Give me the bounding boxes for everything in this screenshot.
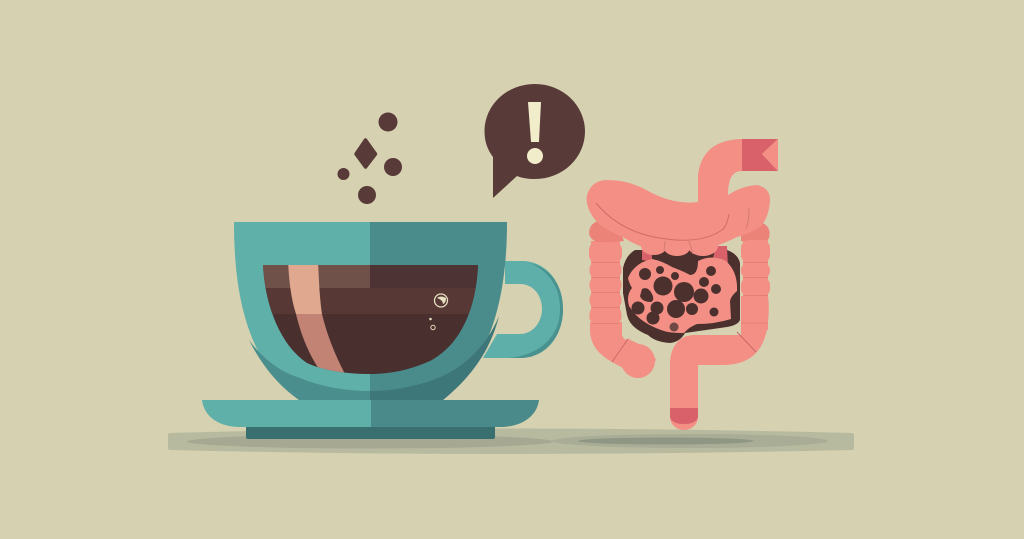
coffee cup: [234, 222, 563, 400]
cup handle: [483, 261, 563, 358]
cream stripe: [288, 260, 322, 314]
upper tube and transverse colon: [587, 139, 778, 256]
ground shadow: [168, 428, 854, 454]
intestine cavities: [632, 266, 721, 324]
right colon and rectum: [670, 222, 770, 430]
steam particles: [338, 112, 402, 204]
saucer: [202, 400, 539, 439]
intestines: [587, 139, 778, 430]
cup body: [234, 222, 370, 400]
cup lower shading: [249, 340, 370, 400]
small red connectors: [642, 250, 652, 262]
small intestine pink mass: [628, 258, 737, 333]
coffee: [263, 265, 478, 374]
red tube end: [742, 139, 778, 171]
lobes under the stomach: [641, 236, 718, 256]
left ascending colon: [589, 220, 656, 378]
central dark mass: [623, 250, 740, 343]
bubbles: [429, 294, 448, 330]
speech bubble with exclamation mark: [484, 84, 585, 198]
